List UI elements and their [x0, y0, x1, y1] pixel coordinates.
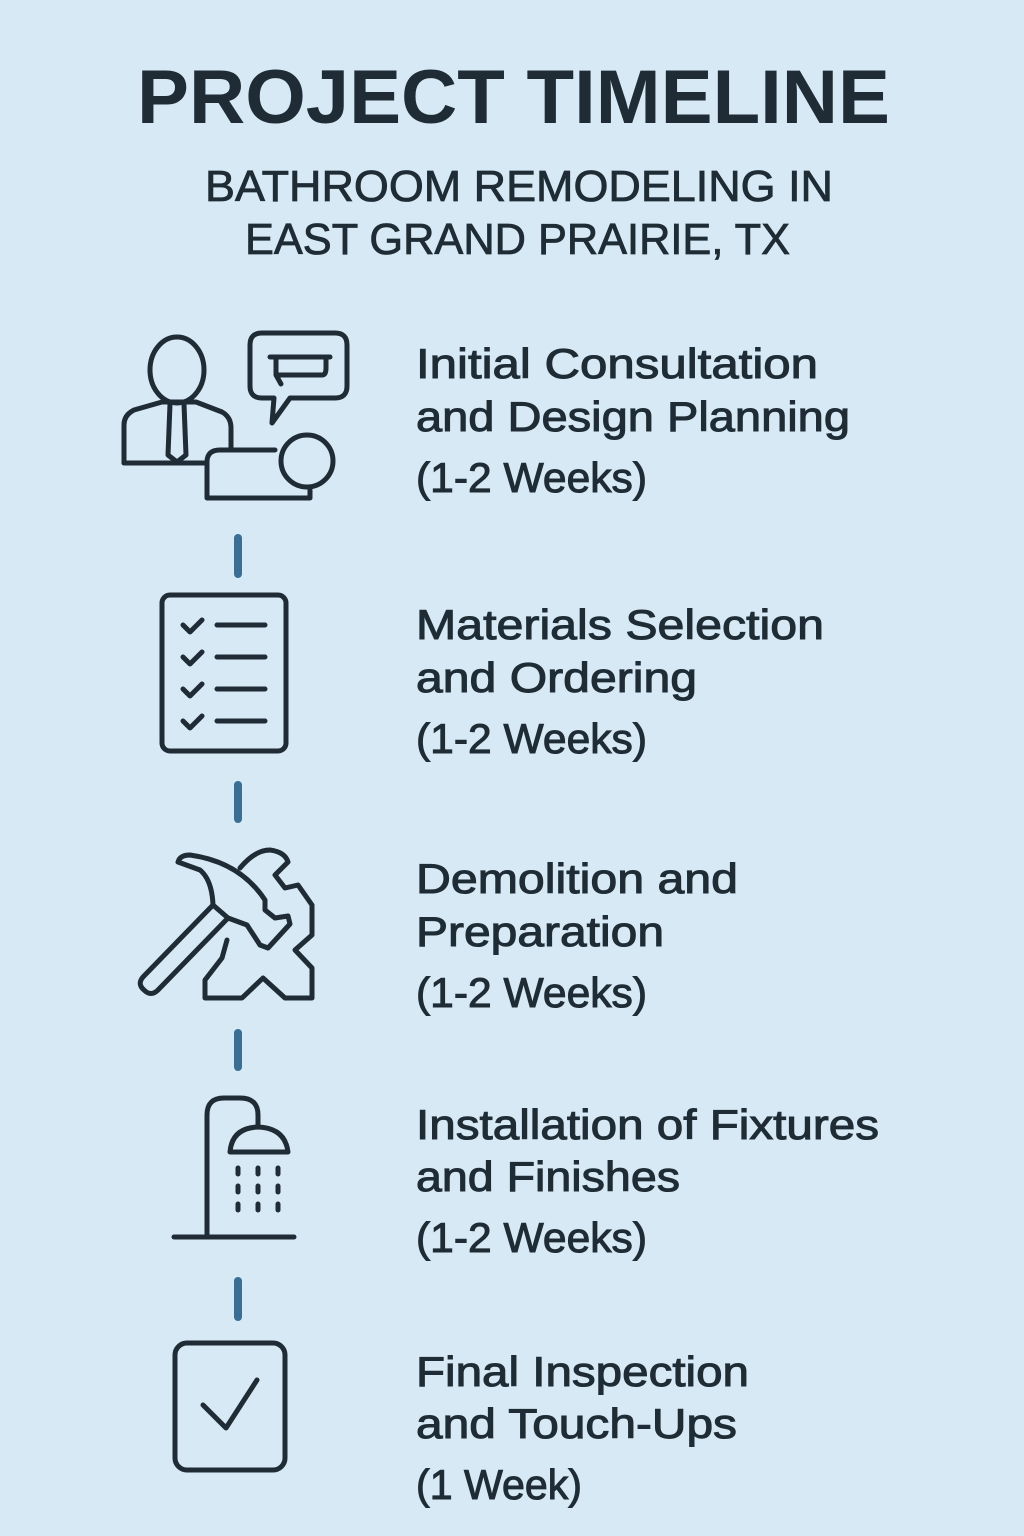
step 2 text: Materials Selection	[416, 601, 824, 648]
icon: shower	[174, 1098, 294, 1237]
step 1 text: Initial Consultation	[416, 340, 818, 387]
step 2 text: and Ordering	[416, 654, 697, 701]
step 4 text: (1-2 Weeks)	[416, 1214, 647, 1261]
step texts	[416, 340, 879, 1508]
icon: checklist	[162, 595, 286, 751]
step 4 text	[416, 1101, 879, 1261]
step 3 text: (1-2 Weeks)	[416, 969, 647, 1016]
step 5 text	[416, 1348, 749, 1508]
step 2 text	[416, 601, 824, 762]
subtitle: EAST GRAND PRAIRIE, TX	[245, 215, 790, 264]
step 5 text: (1 Week)	[416, 1461, 582, 1508]
step 5 text: Final Inspection	[416, 1348, 749, 1395]
subtitle	[205, 162, 833, 264]
step 2 text: (1-2 Weeks)	[416, 715, 647, 762]
step 1 text	[416, 340, 850, 501]
step 4 text: and Finishes	[416, 1153, 680, 1200]
step 4 text: Installation of Fixtures	[416, 1101, 879, 1148]
step 3 text: Demolition and	[416, 855, 738, 902]
step 1 text: and Design Planning	[416, 393, 850, 440]
step 3 text: Preparation	[416, 908, 664, 955]
subtitle: BATHROOM REMODELING IN	[205, 162, 833, 211]
icon: final check	[175, 1343, 285, 1470]
step 1 text: (1-2 Weeks)	[416, 454, 647, 501]
icon: consultation	[124, 333, 347, 498]
title: PROJECT TIMELINE	[137, 55, 890, 140]
timeline dashes	[234, 538, 242, 1317]
step 5 text: and Touch-Ups	[416, 1400, 737, 1447]
icon: demolition hammer	[140, 850, 312, 998]
step 3 text	[416, 855, 738, 1016]
